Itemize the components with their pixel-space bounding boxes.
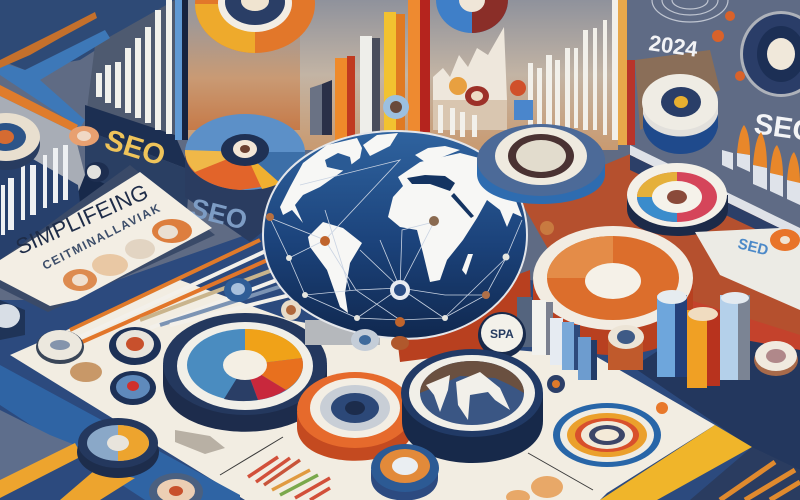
disc: bottom edge [149,473,203,500]
panel: stripes beneath card [70,240,290,342]
text: SEO gold: SEO [101,124,169,173]
icon: concentric lines top [652,0,728,22]
network nodes [266,213,510,327]
bottom chart bars [248,457,330,500]
icon: small discs around globe [224,221,554,351]
disc: tricolour target [627,163,728,236]
disc: top blue [436,0,508,33]
network lines [270,160,522,320]
icon: SPA badge [478,312,526,358]
disc: upper right of globe [477,124,605,204]
panel: orange flame chart [722,125,800,205]
text: SPA: SPA [490,327,514,341]
icon: small disc [85,162,109,182]
map: Red Sea [451,193,474,218]
tan blobs [506,476,563,500]
blue upright [175,0,182,140]
map: Madagascar [462,254,473,275]
map: Hudson Bay [325,153,353,172]
text: card subheading: CEITMINALLAVIAK [40,201,162,273]
icon: small disc on bars [449,77,489,106]
panel: top centre bar chart [310,0,635,145]
globe [263,131,527,339]
dark upright [182,0,188,140]
disc: small orange drum [608,325,644,370]
paper dots [547,375,668,414]
blue band [0,365,240,500]
text: card heading: SIMPLIFEING [12,179,152,260]
disc: swirl [553,403,661,467]
white bar chart [96,0,172,134]
card chips [63,219,192,291]
icon: small orange shapes [712,11,745,81]
text: SEO blue: SEO [188,193,250,236]
map: South America [308,222,362,313]
icon: small blue disc [383,95,409,119]
disc: top orange target [195,0,315,53]
panel: lower paper sheet [0,280,752,500]
disc: orange rings [297,372,413,461]
panel: left bar block [0,140,82,268]
disc: top left target [0,113,40,170]
disc: pie chart [163,313,327,432]
divider line [220,437,593,490]
disc: small bottom centre [371,444,439,500]
chart: columns centre right [517,297,597,380]
map: North America [280,138,362,223]
disc: world map [401,349,543,463]
sketch icon [175,430,225,454]
disc: small right [754,341,798,376]
panel: dark SEO block with bars [75,0,190,240]
icon: pin and blue block [510,80,533,120]
disc: left small discs [36,327,161,405]
panel: bottom left stripes [0,300,135,500]
globe base strips and red band [305,270,532,362]
panel: SED document [695,228,800,310]
map: Greenland [363,133,398,156]
disc: bottom left [77,418,159,478]
disc: large orange [533,226,693,355]
icon: map landmass [426,372,510,420]
icon: small orange disc [69,126,99,146]
text: 2024: 2024 [647,30,700,62]
disc: 2024 white segmented [642,74,718,154]
panel: bottom right stripes [690,447,800,500]
panel: Simplifying card [0,165,215,312]
map: Europe, Asia and Africa [388,153,522,282]
disc: top right navy [740,11,800,97]
text: SED: SED [736,235,770,259]
map: northern Europe [415,146,460,162]
map: Mediterranean [407,175,455,191]
chart: cylinders right [657,290,750,388]
panel: orange pie disc [185,114,305,242]
